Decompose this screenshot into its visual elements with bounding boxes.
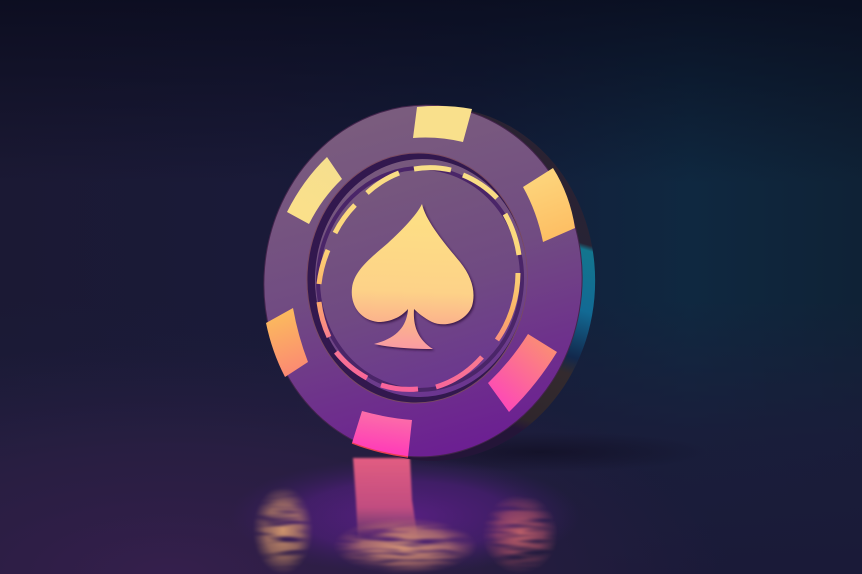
reflection: purple glow (230, 458, 580, 574)
edge squares (266, 106, 575, 457)
chip shadow on floor (370, 432, 710, 472)
ring dashes (319, 168, 519, 389)
chip face (249, 92, 597, 470)
reflection: ripples (253, 486, 558, 574)
chip side edge (260, 94, 610, 474)
icon: spade (352, 204, 475, 351)
chip (249, 92, 610, 474)
reflection: pink column (353, 458, 418, 540)
reflection on floor (230, 458, 580, 574)
inner ring (301, 147, 533, 409)
